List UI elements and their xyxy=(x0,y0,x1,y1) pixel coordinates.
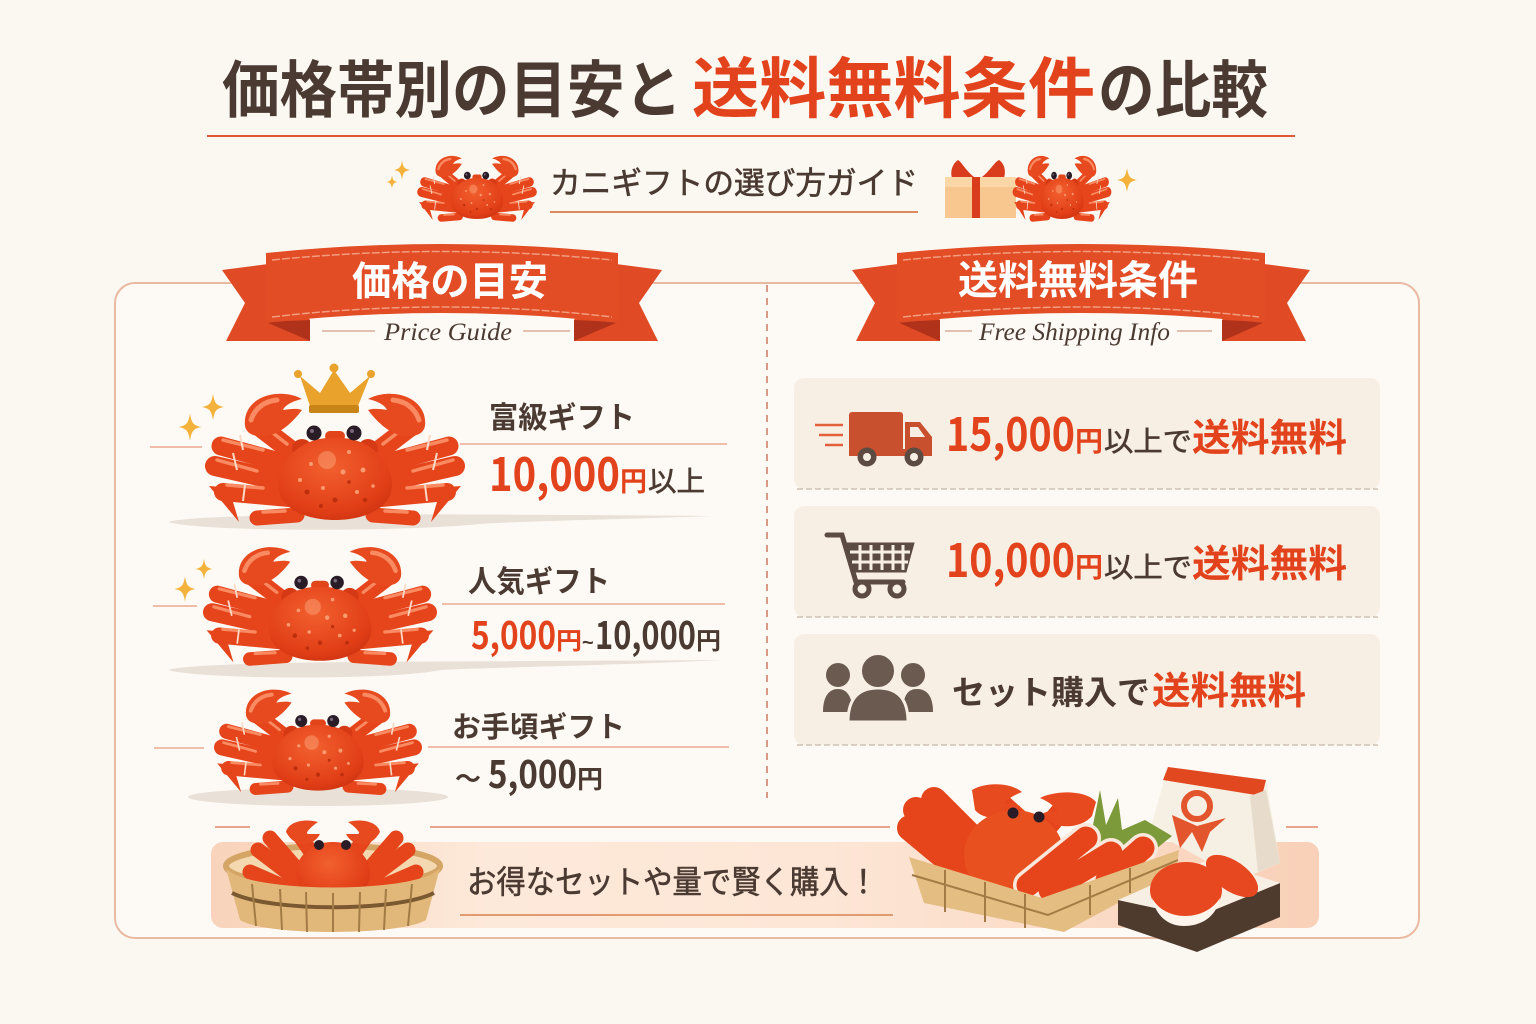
tier price xyxy=(471,605,721,660)
title: の比較 xyxy=(1098,57,1268,126)
icon: crown xyxy=(294,364,375,413)
ribbon: free shipping xyxy=(852,244,1310,346)
tier price: 以上 xyxy=(648,466,705,497)
icon: crab left xyxy=(419,156,535,220)
icon: sparkles xyxy=(174,559,212,602)
tier price: 5,000 xyxy=(471,605,556,660)
card text xyxy=(946,399,1347,465)
tier price: 円 xyxy=(696,621,721,656)
tier price: 10,000 xyxy=(489,439,620,505)
tier: luxury gift xyxy=(150,364,727,530)
card text: 10,000 xyxy=(946,525,1075,591)
tier label: お手頃ギフト xyxy=(452,711,625,744)
banner text: お得なセットや量で賢く購入！ xyxy=(467,864,878,900)
card text: セット購入で xyxy=(952,674,1150,711)
tier price xyxy=(489,439,705,505)
shadow xyxy=(168,660,725,678)
title xyxy=(222,52,1268,126)
banner: bottom message xyxy=(211,767,1319,952)
card: 10000 free shipping xyxy=(794,506,1380,617)
card text: 送料無料 xyxy=(1152,671,1306,713)
card text: 円 xyxy=(1075,546,1103,586)
icon: sparkle right xyxy=(1117,168,1137,192)
icon: crab in wooden tub xyxy=(226,820,440,932)
shadow xyxy=(168,514,715,530)
english label: Price Guide xyxy=(383,319,512,346)
icon: crab right xyxy=(1014,156,1110,220)
tier price: 5,000 xyxy=(488,744,577,799)
panel frame xyxy=(115,283,1419,938)
tier price: 10,000 xyxy=(595,605,696,660)
card text: 15,000 xyxy=(946,399,1075,465)
ribbon: price guide xyxy=(222,244,662,346)
card text: 以上で xyxy=(1104,426,1192,457)
tier label: 人気ギフト xyxy=(468,566,610,599)
icon: medium crab xyxy=(207,547,433,663)
icon: truck xyxy=(815,412,932,466)
english label: Free Shipping Info xyxy=(978,319,1170,346)
icon: gift box xyxy=(945,160,1016,218)
tier price: ～ xyxy=(455,759,481,796)
ribbon heading: 送料無料条件 xyxy=(958,259,1198,303)
icon: large crab xyxy=(209,394,461,522)
title: 送料無料条件 xyxy=(692,52,1095,126)
tier price: 円 xyxy=(556,621,582,656)
icon: crab meat on wooden box xyxy=(1118,847,1280,952)
icon: crab in bamboo basket xyxy=(909,784,1179,932)
tier price: ~ xyxy=(582,632,594,654)
card text: 送料無料 xyxy=(1192,418,1347,460)
shadow xyxy=(188,788,448,806)
ribbon heading: 価格の目安 xyxy=(352,260,548,304)
tier: affordable gift xyxy=(154,690,729,806)
icon: sparkles xyxy=(178,394,224,441)
card text: 以上で xyxy=(1104,552,1192,583)
card text: 送料無料 xyxy=(1192,544,1347,586)
card text xyxy=(952,671,1306,713)
card text xyxy=(946,525,1347,591)
tier: popular gift xyxy=(153,547,725,678)
title: 価格帯別の目安と xyxy=(222,57,682,126)
subtitle row xyxy=(386,156,1137,220)
icon: gift bag xyxy=(1150,767,1280,880)
icon: people xyxy=(823,654,933,722)
tier price: 円 xyxy=(577,760,603,796)
card: 15000 free shipping xyxy=(794,378,1380,489)
column divider xyxy=(766,285,768,798)
subtitle text: カニギフトの選び方ガイド xyxy=(550,166,918,201)
card text: 円 xyxy=(1075,420,1103,460)
tier price: 円 xyxy=(620,460,647,499)
tier label: 富級ギフト xyxy=(489,402,635,435)
icon: small crab xyxy=(217,690,419,792)
card: set purchase free shipping xyxy=(794,634,1380,745)
icon: cart xyxy=(827,535,914,596)
tier price xyxy=(455,744,603,799)
icon: sparkles left xyxy=(386,160,410,189)
